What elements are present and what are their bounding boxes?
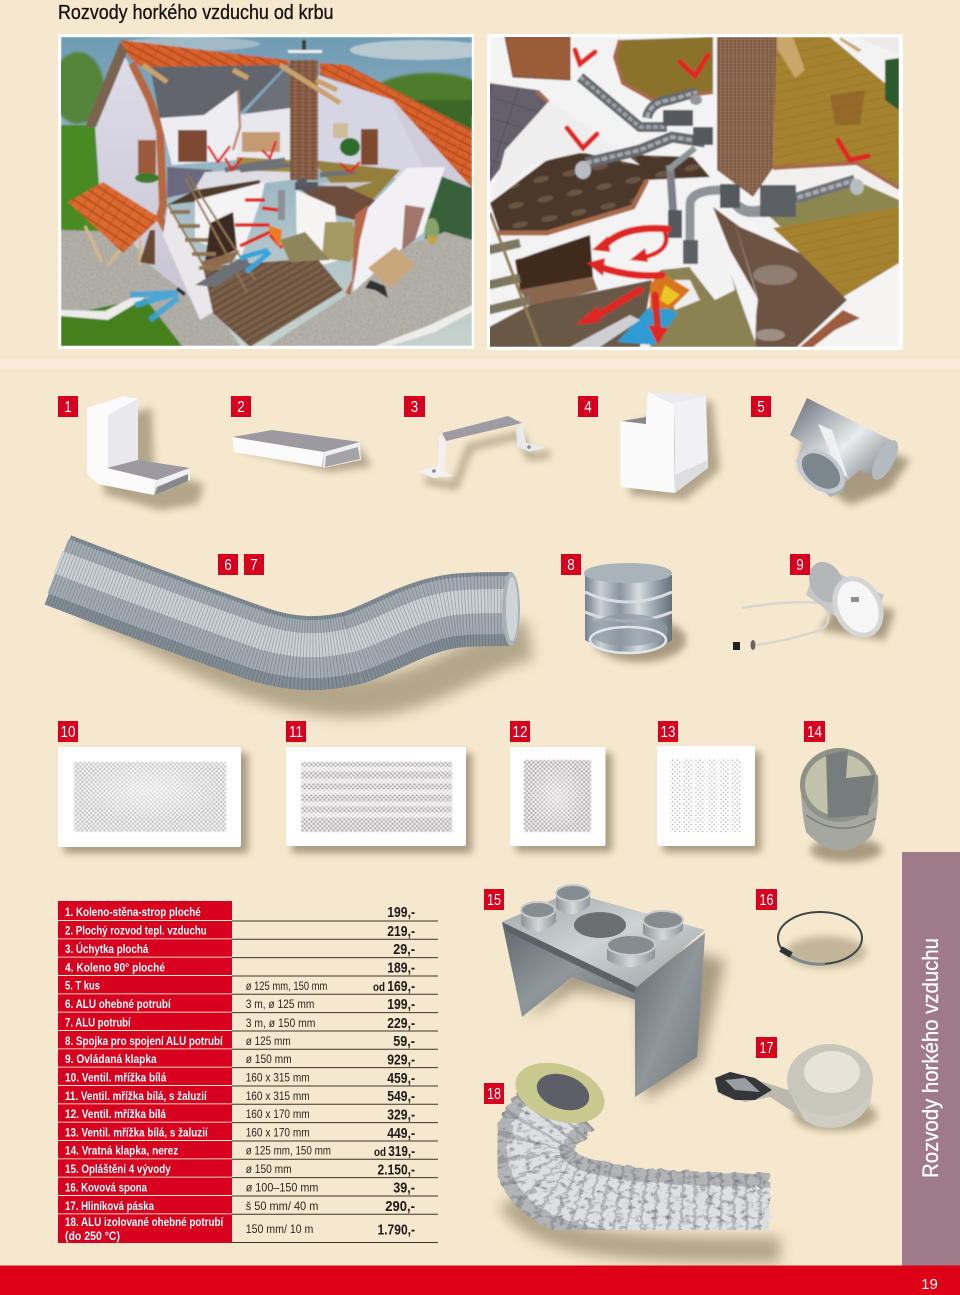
row 16: 16. Kovová spona: [65, 1180, 147, 1194]
badge 3: 3: [411, 399, 418, 416]
number badges: [58, 396, 825, 1104]
badge 13: 13: [660, 724, 676, 741]
row 18: [58, 1214, 438, 1243]
badge 1: [58, 396, 78, 417]
row 14: ø 125 mm, 150 mm: [246, 1144, 331, 1158]
row 4: 189,-: [387, 960, 415, 976]
badge 5: 5: [757, 399, 765, 416]
row 1: 199,-: [387, 904, 415, 921]
row 6: 199,-: [387, 996, 415, 1013]
panel: detailed cutaway illustration: [487, 34, 903, 350]
row 9: [58, 1049, 438, 1068]
badge 15: 15: [487, 892, 501, 909]
row 8: [58, 1031, 438, 1050]
row 14: od: [374, 1145, 386, 1159]
row 10: 160 x 315 mm: [246, 1070, 310, 1084]
badge 17: 17: [760, 1040, 774, 1057]
product 2: flat duct: [232, 430, 372, 472]
row 11: 549,-: [387, 1088, 415, 1105]
row 13: [58, 1123, 438, 1142]
row 16: [58, 1178, 438, 1196]
row 7: 7. ALU potrubí: [65, 1016, 131, 1030]
badge 13: [658, 721, 678, 742]
row 17: 17. Hliníková páska: [65, 1199, 154, 1213]
row 15: 2.150,-: [378, 1162, 415, 1178]
badge 7: [244, 554, 264, 575]
page number: 19: [921, 1276, 938, 1293]
row 18: 150 mm/ 10 m: [246, 1222, 313, 1236]
badge 15: [484, 889, 504, 910]
badge 18: 18: [487, 1086, 501, 1103]
row 8: 8. Spojka pro spojení ALU potrubí: [65, 1034, 223, 1048]
badge 11: 11: [289, 724, 303, 741]
product 14: non-return damper: [800, 748, 882, 862]
product 10: ventilation grille: [58, 747, 248, 853]
row 7: 229,-: [387, 1015, 415, 1032]
side tab: [902, 852, 960, 1266]
row 9: ø 150 mm: [246, 1052, 292, 1066]
badge 14: 14: [807, 724, 822, 741]
row 9: 929,-: [387, 1052, 415, 1068]
badge 18: [484, 1083, 504, 1104]
product 8: pipe connector: [584, 563, 686, 662]
products 6 and 7: flexible aluminium hose: [58, 562, 530, 697]
row 10: 10. Ventil. mřížka bílá: [65, 1070, 167, 1084]
badge 12: 12: [512, 724, 528, 741]
row 3: 29,-: [393, 941, 415, 958]
row 1: [58, 901, 438, 921]
product 5: T piece: [789, 398, 910, 505]
badge 16: [756, 889, 777, 910]
badge 8: 8: [567, 557, 575, 574]
row 12: [58, 1104, 438, 1124]
row 6: [58, 994, 438, 1013]
product 4: elbow 90 degrees: [620, 392, 720, 500]
product 12: small ventilation grille: [510, 747, 612, 852]
badge 16: 16: [760, 892, 774, 909]
product 16: metal clamp: [778, 912, 866, 968]
row 15: [58, 1159, 438, 1178]
badge 6: [218, 554, 238, 575]
row 3: 3. Úchytka plochá: [65, 941, 149, 956]
row 15: 15. Opláštění 4 vývody: [65, 1162, 171, 1176]
price table: [58, 901, 438, 1243]
row 17: [58, 1196, 438, 1215]
row 16: ø 100–150 mm: [246, 1180, 318, 1194]
row 2: [58, 921, 438, 940]
product 11: ventilation grille with louvres: [286, 747, 472, 853]
side tab label: Rozvody horkého vzduchu: [918, 938, 943, 1178]
row 14: 319,-: [388, 1143, 415, 1160]
row 5: ø 125 mm, 150 mm: [246, 979, 327, 993]
title: Rozvody horkého vzduchu od krbu: [58, 2, 334, 24]
row 5: 5. T kus: [65, 978, 100, 992]
decorative band: [0, 359, 960, 369]
row 5: od: [373, 980, 385, 994]
row 6: 3 m, ø 125 mm: [246, 997, 314, 1011]
badge 12: [510, 721, 530, 742]
badge 8: [561, 554, 581, 575]
footer bar: [0, 1266, 960, 1295]
product 18: insulated flexible duct: [508, 1052, 780, 1250]
row 2: 2. Plochý rozvod tepl. vzduchu: [65, 924, 207, 938]
row 10: [58, 1068, 438, 1087]
row 18: 1.790,-: [378, 1222, 415, 1238]
badge 1: 1: [64, 399, 72, 416]
badge 14: [804, 721, 825, 742]
row 4: 4. Koleno 90° ploché: [65, 960, 165, 974]
row 18: (do 250 °C): [65, 1229, 120, 1243]
row 15: ø 150 mm: [246, 1162, 292, 1176]
row 5: [58, 976, 438, 995]
badge 7: 7: [250, 557, 258, 574]
row 2: 219,-: [387, 923, 415, 940]
row 17: 290,-: [385, 1198, 415, 1215]
row 7: 3 m, ø 150 mm: [246, 1016, 315, 1030]
row 12: 160 x 170 mm: [246, 1107, 310, 1121]
product 17: aluminium tape: [715, 1044, 877, 1131]
badge 6: 6: [224, 557, 232, 574]
badge 4: 4: [584, 399, 592, 416]
row 17: š 50 mm/ 40 m: [246, 1199, 318, 1213]
row 3: [58, 939, 438, 958]
row 11: 11. Ventil. mřížka bílá, s žaluzií: [65, 1089, 207, 1103]
badge 3: [404, 396, 425, 417]
row 13: 13. Ventil. mřížka bílá, s žaluzií: [65, 1126, 208, 1140]
row 8: 59,-: [393, 1033, 415, 1050]
row 8: ø 125 mm: [246, 1034, 291, 1048]
row 14: [58, 1141, 438, 1160]
product 3: flat bracket: [417, 416, 550, 486]
row 6: 6. ALU ohebné potrubí: [65, 997, 171, 1011]
badge 11: [286, 721, 306, 742]
badge 17: [756, 1037, 777, 1058]
badge 10: [58, 721, 78, 742]
row 12: 12. Ventil. mřížka bílá: [65, 1107, 166, 1121]
row 10: 459,-: [387, 1070, 415, 1087]
row 5: 169,-: [387, 978, 415, 995]
product 1: elbow wall-ceiling: [87, 396, 204, 510]
row 7: [58, 1013, 438, 1032]
row 11: [58, 1086, 438, 1105]
badge 5: [751, 396, 771, 417]
badge 4: [578, 396, 598, 417]
badge 2: [231, 396, 251, 417]
badge 9: 9: [796, 557, 804, 574]
row 11: 160 x 315 mm: [246, 1089, 310, 1103]
row 18: 18. ALU izolované ohebné potrubí: [65, 1215, 224, 1229]
product 13: small ventilation grille with louvres: [657, 746, 761, 852]
badge 10: 10: [60, 724, 76, 741]
row 12: 329,-: [387, 1106, 415, 1124]
row 14: 14. Vratná klapka, nerez: [65, 1144, 178, 1158]
row 13: 160 x 170 mm: [246, 1126, 310, 1140]
row 1: 1. Koleno-stěna-strop ploché: [65, 905, 201, 919]
badge 2: 2: [237, 399, 245, 416]
row 4: [58, 958, 438, 976]
badge 9: [790, 554, 810, 575]
product 15: four-outlet casing: [502, 885, 725, 1100]
row 13: 449,-: [387, 1125, 415, 1142]
panel: house cutaway illustration: [52, 34, 492, 349]
row 9: 9. Ovládaná klapka: [65, 1052, 157, 1066]
product 9: controlled damper: [733, 556, 895, 650]
row 16: 39,-: [393, 1180, 415, 1196]
